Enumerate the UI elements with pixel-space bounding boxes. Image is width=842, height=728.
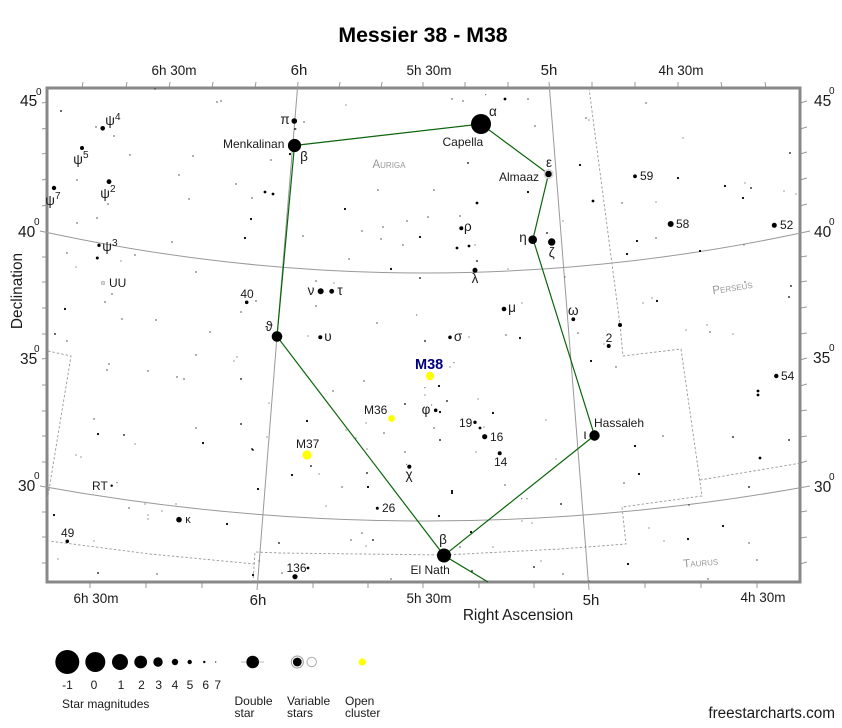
- open cluster: M36: M36: [364, 403, 388, 417]
- named stars with labels: 40: [240, 287, 254, 301]
- title: Messier 38 - M38: [338, 23, 508, 47]
- left declination labels: 0: [34, 217, 40, 228]
- named stars with labels: κ: [185, 514, 191, 526]
- legend: star magnitudes: -1: [62, 678, 73, 692]
- coordinate grid lines: [40, 82, 810, 590]
- bottom right ascension labels: 6h 30m: [73, 591, 119, 606]
- legend: open cluster: [345, 658, 380, 720]
- named stars with labels: 59: [640, 169, 654, 183]
- star: Hassaleh: ι: [584, 427, 586, 442]
- top right ascension labels: [151, 62, 704, 79]
- bottom right ascension labels: 5h 30m: [406, 591, 452, 606]
- legend: star magnitudes: [55, 650, 221, 711]
- named stars with labels: χ: [405, 467, 413, 482]
- open cluster: M38 (highlighted): [415, 357, 443, 380]
- star labels: psi group: [45, 112, 126, 290]
- star labels: psi group: 5: [83, 150, 89, 161]
- named stars with labels: 2: [606, 331, 613, 345]
- named stars with labels: 54: [781, 369, 795, 383]
- named stars with labels: 26: [382, 501, 396, 515]
- psi and variable stars: [52, 126, 111, 285]
- named stars with labels: 16: [490, 430, 504, 444]
- constellation names: Auriga: [372, 159, 406, 171]
- star: Capella: α: [489, 104, 497, 119]
- right declination labels: 45: [814, 93, 831, 110]
- named stars with labels: 58: [676, 217, 690, 231]
- open cluster: M38 (highlighted): M38: [415, 357, 443, 373]
- left declination labels: 35: [20, 351, 37, 368]
- star: Almaaz: Almaaz: [499, 170, 539, 184]
- named stars with labels: ν: [308, 283, 315, 298]
- star: Almaaz: ε: [546, 155, 552, 170]
- open cluster: M37: M37: [296, 437, 320, 451]
- left declination labels: 45: [20, 93, 37, 110]
- legend: star magnitudes: Star magnitudes: [62, 697, 149, 711]
- legend: variable stars: stars: [287, 706, 313, 720]
- legend: double star: star: [234, 706, 255, 720]
- right declination labels: 0: [829, 217, 835, 228]
- bottom right ascension labels: [73, 590, 786, 609]
- named stars with labels: υ: [324, 329, 332, 344]
- axis title: declination: Declination: [9, 253, 26, 329]
- named stars with labels: σ: [454, 329, 463, 344]
- right declination labels: 30: [814, 479, 832, 496]
- chart frame: [47, 88, 800, 582]
- legend: star magnitudes: 6: [202, 678, 209, 692]
- axis title: right ascension: Right Ascension: [463, 607, 573, 624]
- named stars with labels: ζ: [549, 245, 555, 260]
- star: Menkalinan: Menkalinan: [223, 137, 284, 151]
- named stars with labels: ω: [568, 303, 579, 318]
- open cluster: M37: [296, 437, 320, 460]
- open cluster: M36: [364, 403, 395, 422]
- legend: variable stars: Variable: [287, 694, 330, 708]
- legend: double star: [234, 656, 273, 720]
- named stars with labels: 49: [61, 526, 75, 540]
- legend: double star: Double: [234, 694, 273, 708]
- constellation names: Taurus: [683, 556, 719, 571]
- top right ascension labels: 5h: [541, 62, 557, 79]
- named stars with labels: φ: [422, 402, 431, 417]
- legend: variable stars: [287, 656, 330, 720]
- named stars with labels: τ: [337, 283, 343, 298]
- top right ascension labels: 4h 30m: [658, 63, 704, 78]
- left declination labels: 0: [36, 87, 42, 98]
- right declination labels: [813, 86, 835, 496]
- named stars with labels: μ: [508, 300, 516, 315]
- star labels: psi group: 7: [55, 191, 61, 202]
- right declination labels: 0: [829, 472, 835, 483]
- legend: open cluster: cluster: [345, 706, 380, 720]
- background stars: [54, 89, 796, 581]
- named stars with labels: π: [280, 112, 290, 127]
- top right ascension labels: 5h 30m: [406, 63, 452, 78]
- star: Almaaz: [499, 155, 553, 184]
- legend: open cluster: Open: [345, 694, 374, 708]
- top right ascension labels: 6h: [291, 62, 307, 79]
- top right ascension labels: 6h 30m: [151, 63, 197, 78]
- right declination labels: 0: [829, 86, 835, 97]
- legend: star magnitudes: 7: [214, 678, 221, 692]
- legend: star magnitudes: 3: [155, 678, 162, 692]
- star: theta Aurigae: [265, 319, 282, 342]
- constellation lines: [277, 124, 594, 582]
- left declination labels: 0: [34, 471, 40, 482]
- axis tick marks: [42, 82, 807, 588]
- star: El Nath: β: [439, 532, 447, 547]
- website credit: freestarcharts.com: [708, 705, 835, 722]
- constellation boundaries: [47, 88, 801, 582]
- star: Capella: Capella: [442, 135, 484, 149]
- named stars with labels: 19: [459, 416, 473, 430]
- star: Hassaleh: Hassaleh: [594, 416, 644, 430]
- legend: star magnitudes: 4: [172, 678, 179, 692]
- legend: star magnitudes: 1: [118, 678, 125, 692]
- constellation names: [372, 159, 754, 571]
- left declination labels: 40: [18, 224, 36, 241]
- star labels: psi group: ψ: [105, 113, 115, 128]
- named stars with labels: [61, 112, 795, 579]
- star labels: psi group: 3: [112, 238, 118, 249]
- star: theta Aurigae: ϑ: [265, 319, 273, 334]
- right declination labels: 35: [813, 350, 830, 367]
- star labels: psi group: 2: [110, 184, 116, 195]
- star labels: psi group: UU: [109, 276, 126, 290]
- left declination labels: [18, 87, 42, 495]
- star: Menkalinan: β: [300, 149, 308, 164]
- bottom right ascension labels: 5h: [583, 592, 599, 609]
- star labels: psi group: 4: [115, 112, 121, 123]
- constellation names: Perseus: [712, 279, 754, 297]
- bottom right ascension labels: 4h 30m: [740, 590, 786, 605]
- named stars with labels: RT: [92, 479, 108, 493]
- legend: star magnitudes: 0: [91, 678, 98, 692]
- named stars with labels: 136: [286, 561, 307, 575]
- right declination labels: 40: [814, 224, 832, 241]
- star labels: psi group: ψ: [100, 186, 110, 201]
- star labels: psi group: ψ: [73, 152, 83, 167]
- named stars with labels: 52: [780, 218, 794, 232]
- legend: star magnitudes: 2: [138, 678, 145, 692]
- star: Menkalinan: [223, 137, 308, 164]
- star labels: psi group: ψ: [45, 193, 55, 208]
- star: Hassaleh: [584, 416, 644, 442]
- legend: star magnitudes: 5: [187, 678, 194, 692]
- left declination labels: 0: [34, 344, 40, 355]
- left declination labels: 30: [18, 478, 36, 495]
- named stars with labels: ρ: [464, 219, 472, 234]
- star: Capella: [442, 104, 497, 149]
- star labels: psi group: ψ: [102, 239, 112, 254]
- right declination labels: 0: [829, 343, 835, 354]
- star: El Nath: [410, 532, 451, 577]
- named stars with labels: λ: [472, 271, 479, 286]
- named stars with labels: η: [519, 230, 527, 245]
- star: El Nath: El Nath: [410, 563, 450, 577]
- named stars with labels: 14: [494, 455, 508, 469]
- bottom right ascension labels: 6h: [250, 592, 266, 609]
